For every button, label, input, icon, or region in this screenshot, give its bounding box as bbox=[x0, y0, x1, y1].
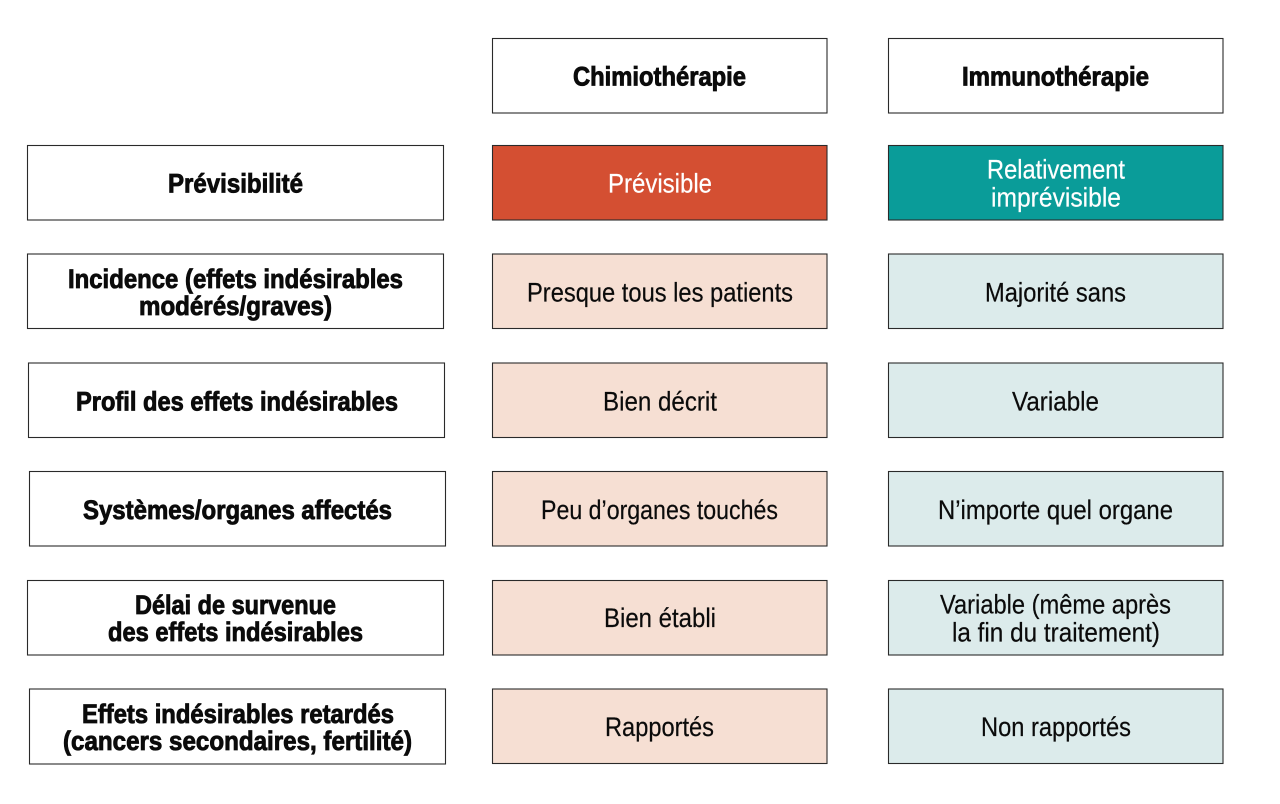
row label: Effets indésirables retardés: (cancers secondaires, fertilité) bbox=[63, 726, 412, 756]
row label: Systèmes/organes affectés: Systèmes/organes affectés bbox=[83, 495, 392, 525]
column header: Immunothérapie bbox=[888, 38, 1223, 113]
row label: Systèmes/organes affectés bbox=[30, 472, 446, 546]
column header: Immunothérapie: Immunothérapie bbox=[962, 62, 1149, 92]
immunotherapy cell: Relativement imprévisible: Relativement bbox=[987, 154, 1126, 184]
chemotherapy cell: Peu d'organes touchés bbox=[492, 472, 827, 546]
row label: Effets indésirables retardés: Effets indésirables retardés bbox=[82, 699, 394, 729]
row label: Délai de survenue bbox=[28, 580, 444, 655]
chemotherapy cell: Peu d'organes touchés: Peu d’organes touchés bbox=[541, 495, 778, 525]
immunotherapy cell: Variable même après la fin du traitement: la fin du traitement) bbox=[952, 618, 1160, 648]
chemotherapy cell: Presque tous les patients bbox=[492, 254, 827, 328]
chemotherapy cell: Bien décrit: Bien décrit bbox=[603, 386, 718, 416]
immunotherapy cell: Variable: Variable bbox=[1012, 386, 1099, 416]
immunotherapy cell: Non rapportés: Non rapportés bbox=[981, 712, 1131, 742]
chemotherapy cell: Bien établi bbox=[492, 580, 827, 655]
chemotherapy cell: Bien décrit bbox=[492, 363, 827, 438]
row label: Délai de survenue: des effets indésirables bbox=[108, 617, 363, 647]
immunotherapy cell: N'importe quel organe bbox=[888, 472, 1223, 546]
chemotherapy cell: Presque tous les patients: Presque tous les patients bbox=[527, 278, 793, 308]
immunotherapy cell: Non rapportés bbox=[888, 689, 1223, 764]
chemotherapy cell: Rapportés bbox=[492, 689, 827, 764]
column header: Chimiothérapie: Chimiothérapie bbox=[573, 62, 746, 92]
row label: Délai de survenue: Délai de survenue bbox=[135, 590, 336, 620]
row label: Incidence: modérés/graves) bbox=[139, 291, 332, 321]
chemotherapy cell: Prévisible: Prévisible bbox=[608, 168, 712, 198]
column header: Chimiothérapie bbox=[492, 38, 827, 113]
chemotherapy cell: Prévisible bbox=[492, 146, 827, 220]
row label: Profil des effets indésirables bbox=[28, 363, 444, 438]
row label: Prévisibilité: Prévisibilité bbox=[168, 168, 303, 198]
immunotherapy cell: Variable même après la fin du traitement bbox=[888, 580, 1223, 655]
row label: Profil des effets indésirables: Profil des effets indésirables bbox=[76, 386, 398, 416]
immunotherapy cell: Relativement imprévisible: imprévisible bbox=[991, 182, 1121, 212]
immunotherapy cell: N'importe quel organe: N’importe quel organe bbox=[938, 495, 1173, 525]
immunotherapy cell: Variable même après la fin du traitement: Variable (même après bbox=[940, 590, 1171, 620]
chemotherapy cell: Rapportés: Rapportés bbox=[605, 712, 714, 742]
immunotherapy cell: Majorité sans bbox=[888, 254, 1223, 328]
immunotherapy cell: Relativement imprévisible bbox=[888, 146, 1223, 220]
immunotherapy cell: Variable bbox=[888, 363, 1223, 438]
row label: Effets indésirables retardés bbox=[30, 689, 446, 764]
immunotherapy cell: Majorité sans: Majorité sans bbox=[985, 278, 1126, 308]
row label: Incidence: Incidence (effets indésirables bbox=[68, 264, 403, 294]
chemotherapy cell: Bien établi: Bien établi bbox=[604, 603, 716, 633]
row label: Prévisibilité bbox=[28, 146, 444, 220]
row label: Incidence bbox=[28, 254, 444, 328]
